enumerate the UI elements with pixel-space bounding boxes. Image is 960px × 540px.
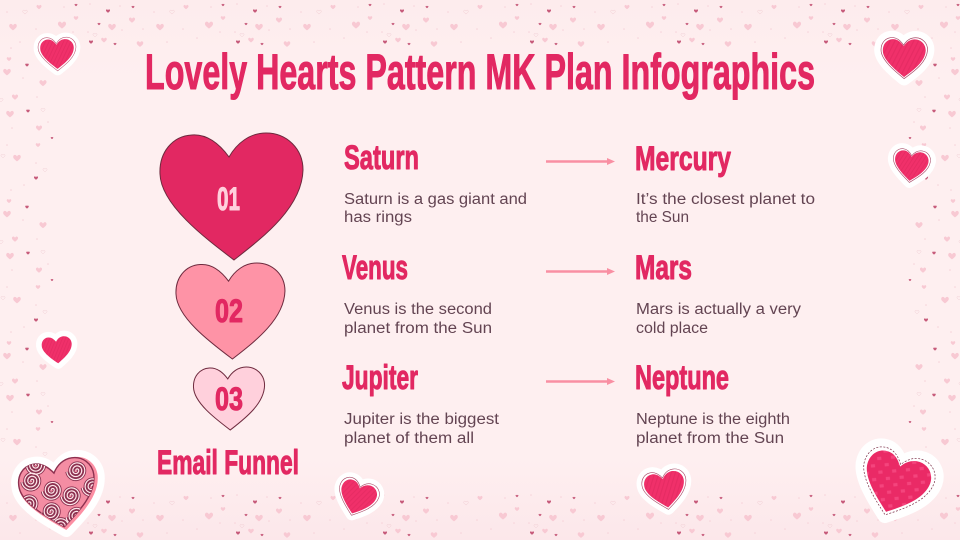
spiral pattern xyxy=(20,461,94,526)
row 3: Jupiter: Jupiter xyxy=(342,359,418,397)
row 3: Neptune: Neptune xyxy=(635,359,729,397)
sticker: left heart xyxy=(41,335,73,365)
funnel hearts xyxy=(160,133,303,430)
row 2: Venus: Venus xyxy=(342,249,408,287)
funnel caption: Email Funnel xyxy=(157,444,299,482)
sticker: patterned heart bottom-right xyxy=(848,439,942,529)
row 3: Neptune: planet from the Sun xyxy=(636,430,784,447)
sticker: bottom heart 1 xyxy=(332,474,382,522)
sticker: bottom heart 2 xyxy=(640,467,690,513)
funnel level 02 xyxy=(176,263,285,359)
row 1: Mercury: It’s the closest planet to xyxy=(636,191,815,208)
row 3: Jupiter: planet of them all xyxy=(344,430,474,447)
sticker: right heart xyxy=(890,147,932,185)
row 1: Saturn xyxy=(344,139,527,226)
arrow: Jupiter to Neptune xyxy=(546,378,615,385)
row 3: Jupiter xyxy=(342,359,500,447)
row 3: Neptune: Neptune is the eighth xyxy=(636,411,790,428)
row 2: Venus: planet from the Sun xyxy=(344,320,492,337)
row 2: Mars: Mars xyxy=(635,249,692,287)
funnel level 02: 02 xyxy=(215,293,243,329)
row 2: Mars: Mars is actually a very xyxy=(636,301,801,318)
row 2: Mars xyxy=(635,249,801,337)
row 2: Mars: cold place xyxy=(636,320,708,337)
arrow: Saturn to Mercury xyxy=(546,158,615,165)
row 1: Saturn: Saturn is a gas giant and xyxy=(344,191,527,208)
sticker: top-right heart xyxy=(880,36,928,80)
row 1: Mercury: the Sun xyxy=(636,209,689,226)
row 1: Mercury xyxy=(635,140,815,226)
row 2: Venus xyxy=(342,249,492,337)
funnel level 01 xyxy=(160,133,303,260)
arrow: Venus to Mars xyxy=(546,268,615,275)
row 1: Saturn: has rings xyxy=(344,209,412,226)
sticker: spiral heart bottom-left xyxy=(13,449,106,540)
row 3: Neptune xyxy=(635,359,790,447)
row 1: Saturn: Saturn xyxy=(344,139,419,177)
row 2: Venus: Venus is the second xyxy=(344,301,492,318)
funnel level 03: 03 xyxy=(215,381,243,417)
funnel level 01: 01 xyxy=(217,181,240,217)
row 3: Jupiter: Jupiter is the biggest xyxy=(344,411,500,428)
sticker: top-left heart xyxy=(38,37,76,71)
funnel level 03 xyxy=(193,367,265,430)
row 1: Mercury: Mercury xyxy=(635,140,731,178)
